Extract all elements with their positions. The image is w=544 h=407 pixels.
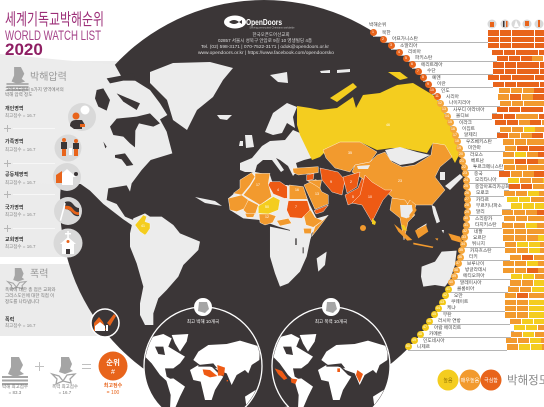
ranking list with score bars: 알제리: [464, 132, 477, 137]
formula: total rank: 순위: [106, 357, 120, 367]
text: violence score: 최고점수 = 16.7: [5, 322, 36, 329]
formula: violence score: 폭력 최고점수: [52, 383, 78, 390]
ranking list with score bars: 이란: [437, 81, 446, 86]
map: North America: [0, 53, 172, 228]
ranking list with score bars: 브루나이: [467, 261, 484, 266]
formula: persecution score: = 83.3: [9, 390, 22, 395]
ranking list with score bars: 스리랑카: [475, 216, 492, 221]
formula: violence score: = 16.7: [59, 390, 72, 395]
legend: [438, 370, 544, 390]
legend: 극심함: [484, 377, 498, 384]
ranking list with score bars: 8: [422, 75, 424, 79]
column icons: [488, 20, 544, 28]
ranking list with score bars: 리비아: [408, 49, 421, 54]
ranking list with score bars: 모리타니아: [475, 177, 497, 182]
formula: total rank: 최고점수: [104, 382, 123, 389]
ranking list with score bars: 5: [405, 56, 407, 60]
Open Doors logo and contact: OpenDoors: [246, 18, 282, 27]
ranking list with score bars: 47: [423, 325, 427, 329]
ranking list with score bars: 33: [462, 235, 466, 239]
ranking list with score bars: 29: [465, 210, 469, 214]
text: private sphere: 개인영역: [5, 105, 24, 112]
plus sign: [35, 362, 44, 371]
ranking list with score bars: 32: [463, 229, 467, 233]
panel: violence background: [0, 264, 200, 336]
ranking list with score bars: 6: [411, 62, 413, 66]
ranking list with score bars: 45: [432, 312, 436, 316]
ranking list with score bars: 에티오피아: [463, 273, 485, 278]
ranking list with score bars: 42: [443, 293, 447, 297]
ranking list with score bars: 3: [390, 43, 392, 47]
ranking list with score bars: 7: [417, 69, 419, 73]
formula: persecution score: 박해 최고점수: [2, 383, 28, 390]
ranking list with score bars: 러시아 연방: [438, 318, 461, 323]
text: church sphere: 최고점수 = 16.7: [5, 243, 36, 250]
ranking list with score bars: 41: [446, 287, 450, 291]
ranking list with score bars: 모로코: [476, 190, 489, 195]
ranking list with score bars: 소말리아: [400, 43, 417, 48]
formula: total rank: #: [111, 369, 115, 376]
ranking list with score bars: 31: [464, 223, 468, 227]
text: church sphere: 교회영역: [5, 236, 24, 243]
ranking list with score bars: 19: [457, 146, 461, 150]
formula: persecution score: [2, 357, 28, 395]
Open Doors logo and contact: 한국오픈도어선교회: [252, 31, 290, 38]
formula: total rank: [98, 352, 128, 396]
map: rank numbers on countries: 4: [277, 188, 279, 192]
map: rank numbers on countries: 2: [350, 180, 352, 184]
title: 세계기독교박해순위: [5, 10, 104, 29]
ranking list with score bars: 18: [455, 139, 459, 143]
map: rank numbers on countries: 13: [315, 192, 319, 196]
ranking list with score bars: 부르키나파소: [476, 203, 502, 208]
list header: 박해순위: [369, 21, 386, 28]
map: rank numbers on countries: [141, 123, 402, 228]
ranking list with score bars: 13: [442, 107, 446, 111]
dark world circle: [60, 0, 468, 407]
heading: violence: 폭력에 대한 총 점은 교회와: [5, 286, 56, 293]
ranking list with score bars: 12: [438, 101, 442, 105]
map: Europe: [239, 103, 312, 176]
ranking list with score bars: 예멘: [432, 75, 441, 80]
map: lower Africa, South America, Madagascar: [130, 213, 327, 325]
text: community sphere: [5, 171, 36, 186]
ranking list with score bars: 48: [418, 332, 422, 336]
ranking list with score bars: 라오스: [470, 152, 483, 157]
panel: persecution background: [0, 61, 200, 257]
map: Sri Lanka, Maldives: [360, 218, 376, 231]
ranking list with score bars: 쿠웨이트: [451, 299, 468, 304]
map: rank numbers on countries: 23: [398, 179, 402, 183]
title: WORLD WATCH LIST: [5, 28, 101, 43]
Open Doors logo and contact: Tel. (02) 598-3171 | 070-7522-3171 | odok@opendoors.or.kr: [201, 44, 330, 49]
text: national sphere: 최고점수 = 16.7: [5, 211, 36, 218]
plus signs between spheres: [4, 125, 55, 232]
ranking list with score bars: 네팔: [474, 228, 483, 234]
ranking list with score bars: 베트남: [471, 158, 484, 163]
ranking list with score bars: 아랍 에미리트: [434, 325, 461, 330]
ranking list with score bars: 20: [459, 152, 463, 156]
ranking list with score bars: 34: [461, 242, 465, 246]
heading: persecution pressure: [5, 67, 67, 98]
text: violence score: [5, 316, 36, 329]
ranking list with score bars: 9: [427, 82, 429, 86]
text: family sphere: 최고점수 = 16.7: [5, 146, 36, 153]
Open Doors logo and contact: 02857 서울시 성북구 안암로 9길 10 영생빌딩 4층: [218, 37, 312, 44]
ranking list with score bars: 27: [465, 197, 469, 201]
map: rank numbers on countries: 35: [348, 151, 352, 155]
ranking list with score bars: 우즈베키스탄: [466, 139, 492, 144]
ranking list with score bars: 터키: [469, 254, 478, 259]
map: Southeast Asia and Australia: [394, 198, 463, 287]
ranking list with score bars: 수단: [427, 68, 436, 73]
icon: private sphere: [68, 103, 96, 131]
title: 2020: [5, 40, 43, 59]
ranking list with score bars: 몰디브: [456, 113, 469, 118]
ranking list with score bars: 26: [465, 191, 469, 195]
ranking list with score bars: 미얀마: [468, 145, 481, 150]
ranking list with score bars: 타지키스탄: [475, 222, 497, 227]
equals sign: [82, 364, 91, 369]
ranking list with score bars: 22: [462, 165, 466, 169]
heading: violence: 정도를 나타냅니다: [5, 298, 40, 305]
ranking list with score bars: 43: [440, 300, 444, 304]
text: community sphere: 최고점수 = 16.7: [5, 179, 36, 186]
map: rank numbers on countries: 5: [352, 195, 354, 199]
ranking list with score bars: 이라크: [459, 120, 472, 124]
text: community sphere: 공동체영역: [5, 171, 28, 178]
ranking list with score bars: 1: [372, 30, 374, 34]
ranking list with score bars: 중국: [474, 171, 483, 176]
ranking list with score bars: 나이지리아: [449, 100, 471, 105]
ranking list with score bars: 중앙아프리카공화국: [475, 184, 514, 189]
map: rank numbers on countries: 9: [330, 180, 332, 184]
ranking list with score bars: 35: [459, 248, 463, 252]
mini map: top 10 persecution: 최고 박해 10개국: [187, 318, 219, 325]
ranking list with score bars: 방글라데시: [465, 267, 487, 272]
ranking list with score bars: 38: [454, 268, 458, 272]
ranking list with score bars: 시리아: [446, 94, 459, 99]
map: rank numbers on countries: 46: [386, 123, 390, 127]
ranking list with score bars: 24: [464, 178, 468, 182]
heading: violence: 그리스도인에 대한 직접 이: [5, 292, 54, 299]
ranking list with score bars: 말레이시아: [460, 280, 482, 285]
ranking list with score bars: 니제르: [417, 344, 430, 349]
map: rank numbers on countries: 50: [265, 205, 269, 209]
ranking list with score bars: 요르단: [473, 235, 486, 240]
ranking list with score bars: 15: [448, 120, 452, 124]
icon: violence: [91, 309, 119, 337]
ranking list with score bars: 36: [458, 255, 462, 259]
Open Doors logo and contact: www.opendoors.or.kr | https://www.facebook.com/opendoorsko: [198, 50, 335, 55]
heading: violence: [5, 268, 56, 305]
text: violence score: 폭력: [5, 316, 15, 323]
mini map: top 10 violence: [272, 298, 391, 407]
text: family sphere: [5, 138, 36, 153]
ranking list with score bars: 4: [398, 50, 400, 54]
formula: total rank: = 100: [107, 390, 120, 396]
formula: violence score: [52, 357, 78, 395]
ranking list with score bars: 북한: [382, 30, 391, 35]
ranking list with score bars: 카타르: [476, 196, 489, 202]
text: national sphere: [5, 204, 36, 218]
ranking list with score bars: 23: [463, 171, 467, 175]
text: family sphere: 가족영역: [5, 138, 24, 145]
legend: 높음: [443, 377, 453, 384]
ranking list with score bars: 21: [460, 158, 464, 162]
ranking list with score bars: 콜롬비아: [457, 286, 474, 291]
ranking list with score bars: 40: [449, 280, 453, 284]
text: church sphere: [5, 236, 36, 250]
text: private sphere: [5, 105, 36, 119]
map: Greenland and northern islands: [150, 62, 350, 206]
heading: persecution pressure: 그리스도인이 5가지 영역에서의: [5, 86, 64, 93]
ranking list with score bars: 투르크메니스탄: [473, 164, 503, 169]
legend: 매우높음: [461, 377, 480, 384]
ranking list with score bars: 37: [456, 261, 460, 265]
ranking list with score bars: 사우디 아라비아: [453, 107, 484, 112]
map: Russia: [297, 72, 460, 163]
map: rank numbers on countries: 10: [368, 195, 372, 199]
text: private sphere: 최고점수 = 16.7: [5, 112, 36, 119]
ranking list with score bars: 14: [445, 114, 449, 118]
map: rank numbers on countries: 17: [256, 183, 260, 187]
ranking list with score bars: 25: [464, 184, 468, 188]
map: Mongolia, Korea, Japan: [357, 147, 463, 218]
Hudson Bay and arctic channels: [95, 73, 160, 166]
icon: national sphere: [54, 197, 82, 225]
heading: violence: 폭력: [30, 268, 48, 280]
ranking list with score bars: 카메룬: [429, 331, 442, 336]
ranking list with score bars: 튀니지: [472, 241, 485, 246]
ranking list with score bars: 28: [465, 203, 469, 207]
ranking list with score bars: 39: [452, 274, 456, 278]
ranking list with score bars: 46: [427, 319, 431, 323]
Open Doors logo and contact: [198, 16, 335, 55]
ranking list with score bars: 말리: [476, 209, 485, 214]
map: rank numbers on countries: 16: [295, 188, 299, 192]
ranking list with score bars: 인도네시아: [423, 338, 445, 342]
ranking list with score bars: 에리트레아: [421, 62, 443, 67]
icon: family sphere: [54, 134, 82, 162]
ranking list with score bars: 10: [430, 88, 434, 92]
ranking list with score bars: 16: [451, 126, 455, 130]
icon: church sphere: [54, 228, 82, 258]
title: [5, 10, 104, 59]
ranking list with score bars: 11: [435, 94, 439, 98]
mini map: top 10 violence: 최고 폭력 10개국: [315, 318, 347, 325]
ranking list with score bars: 50: [406, 344, 410, 348]
ranking list with score bars: 인도: [441, 88, 450, 92]
ranking list with score bars: 카자흐스탄: [470, 248, 492, 253]
ranking list with score bars: 49: [412, 338, 416, 342]
ranking list with score bars: 30: [464, 216, 468, 220]
map: south Asia and Middle East, high persecution: [320, 168, 392, 222]
ranking list with score bars: 케냐: [447, 305, 456, 310]
ranking list with score bars: 2: [382, 37, 384, 41]
ranking list with score bars: 이집트: [462, 126, 475, 131]
mini map: top 10 persecution: [144, 298, 263, 407]
ranking list with score bars: 44: [436, 306, 440, 310]
map: rank numbers on countries: 12: [265, 215, 269, 219]
ranking list with score bars: 파키스탄: [415, 55, 432, 60]
text: national sphere: 국가영역: [5, 204, 24, 211]
ranking list with score bars: 부탄: [443, 312, 452, 317]
icon: community sphere: [53, 163, 81, 191]
map: rank numbers on countries: 7: [295, 205, 297, 209]
ranking list with score bars: 아프가니스탄: [392, 36, 418, 41]
heading: persecution pressure: 박해 압력 정도: [5, 91, 32, 98]
Open Doors logo and contact: Serving persecuted Christians worldwide: [249, 26, 295, 30]
heading: persecution pressure: 박해압력: [30, 70, 67, 83]
ranking list with score bars: 17: [453, 133, 457, 137]
map: rank numbers on countries: 41: [141, 224, 145, 228]
map: Africa and Middle East: [228, 167, 328, 240]
ranking list with score bars: 오만: [454, 293, 463, 298]
map: central Asia and China: [323, 142, 452, 240]
